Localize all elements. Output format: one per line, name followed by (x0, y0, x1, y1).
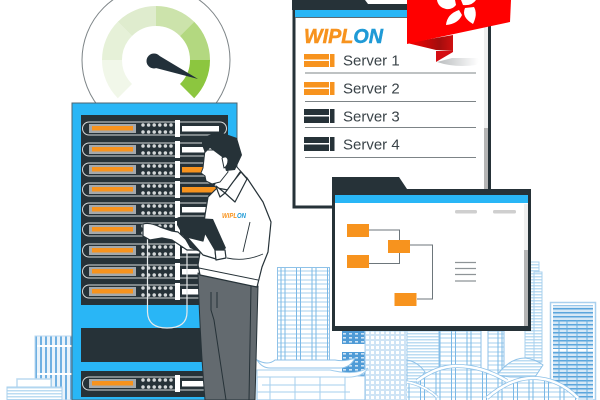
toolbar items (455, 210, 516, 214)
gauge dial (82, 0, 230, 134)
server row 3 (82, 161, 226, 178)
tablet (177, 217, 226, 258)
server row 10 (82, 375, 226, 392)
server item 3: Server 3 (343, 108, 400, 126)
collar (216, 172, 247, 202)
connector lines (369, 230, 432, 299)
hand on tablet (187, 233, 216, 259)
neck (214, 166, 245, 198)
window title bar (335, 195, 528, 203)
building: right of window (525, 262, 542, 362)
speedometer gauge (82, 0, 230, 134)
window scrollbar (524, 204, 528, 326)
building: left stack (7, 336, 72, 400)
server row 6 (82, 221, 226, 238)
window frame (332, 177, 531, 331)
flowchart window (332, 177, 531, 331)
shirt logo: WIPLON (222, 211, 246, 220)
server row 8 (82, 263, 226, 280)
server item 4: Server 4 (343, 136, 400, 154)
server row 4 (82, 181, 226, 198)
person (143, 132, 271, 400)
ribbon fold (436, 51, 453, 62)
building: mid towers (342, 331, 504, 400)
ribbon shadow (437, 58, 479, 66)
server item 2: Server 2 (343, 80, 400, 98)
window title bar (292, 0, 491, 18)
rack frame (72, 103, 237, 400)
server item 4 (304, 136, 476, 158)
server row 1 (82, 120, 226, 137)
server rack (72, 103, 237, 400)
trousers (198, 273, 258, 400)
flag body (407, 0, 511, 44)
city skyline (7, 262, 596, 400)
server item 2 (304, 80, 476, 102)
flowchart nodes (347, 224, 416, 306)
ear (222, 157, 228, 168)
server item 1: Server 1 (343, 52, 400, 70)
rack bays (81, 305, 228, 397)
shirt folds (199, 222, 263, 280)
face (201, 150, 228, 184)
server row 5 (82, 201, 226, 218)
hair (202, 132, 242, 171)
Hong Kong flag ribbon (407, 0, 511, 66)
arched halls (407, 358, 578, 400)
rack interior (81, 115, 228, 305)
building: tower behind panel (278, 268, 330, 362)
shirt cuff (215, 250, 226, 260)
window frame (292, 0, 491, 208)
bauhinia flower (437, 0, 476, 25)
server row 9 (82, 283, 226, 300)
gauge segments (102, 6, 210, 98)
logo: WIPLON: WIPLON (304, 26, 384, 48)
shirt (198, 172, 271, 287)
far arm and hand (143, 223, 197, 250)
pagoda (257, 358, 368, 400)
building: right tower (550, 302, 596, 400)
text lines (455, 262, 476, 281)
server list window (292, 0, 491, 208)
patch cable (148, 236, 187, 328)
server row 2 (82, 141, 226, 158)
server row 7 (82, 242, 226, 259)
server item 1 (304, 52, 476, 73)
server item 3 (304, 108, 476, 128)
gauge needle (146, 54, 198, 79)
window scrollbar (484, 18, 488, 190)
